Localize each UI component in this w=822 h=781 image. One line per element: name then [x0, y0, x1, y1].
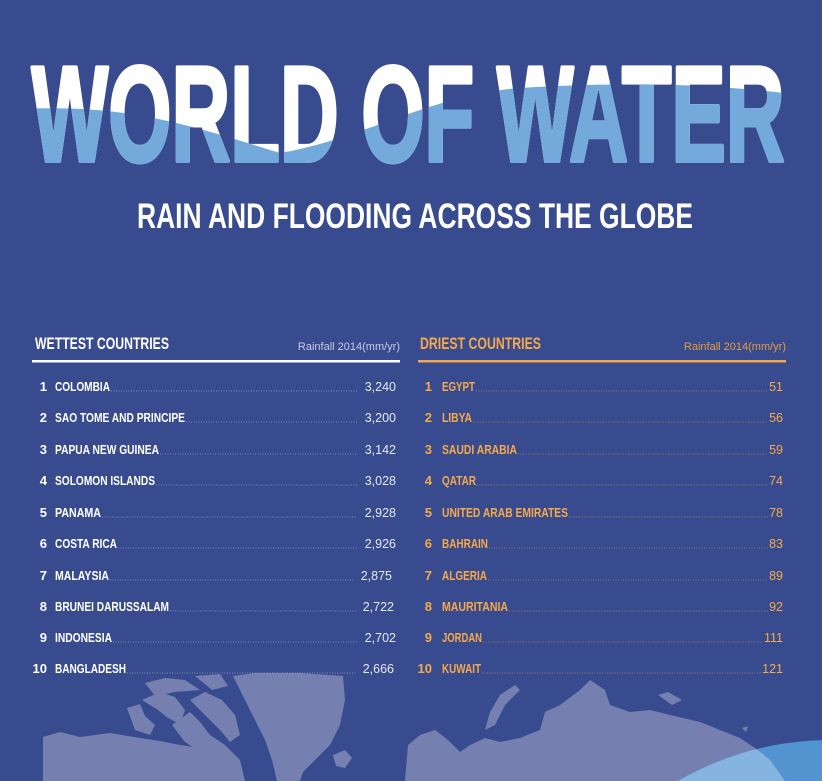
panel: wettest countries: 10: [33, 661, 47, 676]
panel: driest countries: 56: [769, 411, 783, 425]
panel: driest countries: 10: [418, 661, 432, 676]
panel: wettest countries: 2,875: [361, 569, 392, 583]
heading: driest: DRIEST COUNTRIES: [420, 334, 541, 353]
panel: driest countries: KUWAIT: [442, 661, 481, 676]
panel: wettest countries: BRUNEI DARUSSALAM: [55, 599, 169, 614]
panel: driest countries: 2: [425, 410, 432, 425]
panel: driest countries: 1: [425, 379, 432, 394]
panel: driest countries: EGYPT: [442, 379, 475, 394]
panel: driest countries: 59: [769, 443, 783, 457]
panel: wettest countries: 1: [40, 379, 47, 394]
panel: wettest countries: PAPUA NEW GUINEA: [55, 442, 159, 457]
panel: driest countries: 74: [769, 474, 783, 488]
panel: wettest countries: MALAYSIA: [55, 568, 109, 583]
panel: wettest countries: 3,240: [365, 380, 396, 394]
panel: driest countries: 89: [769, 569, 783, 583]
panel: wettest countries: 4: [40, 473, 48, 488]
panel: wettest countries: 9: [40, 630, 47, 645]
panel: driest countries: SAUDI ARABIA: [442, 442, 517, 457]
panel: wettest countries: 5: [40, 505, 47, 520]
panel: driest countries: 9: [425, 630, 432, 645]
panel: driest countries: 78: [769, 506, 783, 520]
map: globe: [678, 740, 822, 781]
panel: wettest countries: 3,200: [365, 411, 396, 425]
panel: driest countries: 3: [425, 442, 432, 457]
panel: driest countries: [418, 334, 786, 676]
panel: wettest countries: 2: [40, 410, 47, 425]
panel: wettest countries: 8: [40, 599, 47, 614]
title: WORLD OF WATER: [30, 64, 784, 164]
map: world landmasses: [43, 673, 785, 781]
panel: driest countries: MAURITANIA: [442, 599, 508, 614]
panel: wettest countries: 2,722: [363, 600, 394, 614]
panel: wettest countries: SAO TOME AND PRINCIPE: [55, 410, 185, 425]
panel: wettest countries: BANGLADESH: [55, 661, 126, 676]
panel: driest countries: 8: [425, 599, 432, 614]
panel: driest countries: 121: [762, 662, 783, 676]
panel: wettest countries: 3: [40, 442, 47, 457]
unit label: Rainfall 2014(mm/yr): [684, 341, 786, 353]
panel: wettest countries: 2,926: [365, 537, 396, 551]
panel: wettest countries: 2,702: [365, 631, 396, 645]
panel: wettest countries: 2,928: [365, 506, 396, 520]
panel: driest countries: ALGERIA: [442, 568, 487, 583]
panel: wettest countries: 3,028: [365, 474, 396, 488]
panel: driest countries: 7: [425, 568, 432, 583]
panel: wettest countries: COSTA RICA: [55, 536, 117, 551]
panel: wettest countries: 2,666: [363, 662, 394, 676]
panel: driest countries: 6: [425, 536, 432, 551]
panel: wettest countries: [32, 334, 400, 676]
panel: driest countries: 111: [764, 631, 783, 645]
panel: wettest countries: COLOMBIA: [55, 379, 110, 394]
panel: wettest countries: INDONESIA: [55, 630, 112, 645]
unit label: Rainfall 2014(mm/yr): [298, 341, 400, 353]
panel: wettest countries: SOLOMON ISLANDS: [55, 473, 155, 488]
panel: driest countries: 51: [769, 380, 783, 394]
panel: driest countries: LIBYA: [442, 410, 472, 425]
panel: wettest countries: 6: [40, 536, 47, 551]
panel: wettest countries: 3,142: [365, 443, 396, 457]
panel: wettest countries: PANAMA: [55, 505, 101, 520]
panel: driest countries: JORDAN: [442, 630, 482, 645]
panel: driest countries: QATAR: [442, 473, 476, 488]
panel: driest countries: 92: [769, 600, 783, 614]
panel: wettest countries: 7: [40, 568, 47, 583]
heading: wettest: WETTEST COUNTRIES: [35, 334, 169, 353]
panel: driest countries: UNITED ARAB EMIRATES: [442, 505, 568, 520]
panel: driest countries: 5: [425, 505, 432, 520]
panel: driest countries: 83: [769, 537, 783, 551]
panel: driest countries: 4: [425, 473, 433, 488]
panel: driest countries: BAHRAIN: [442, 536, 488, 551]
